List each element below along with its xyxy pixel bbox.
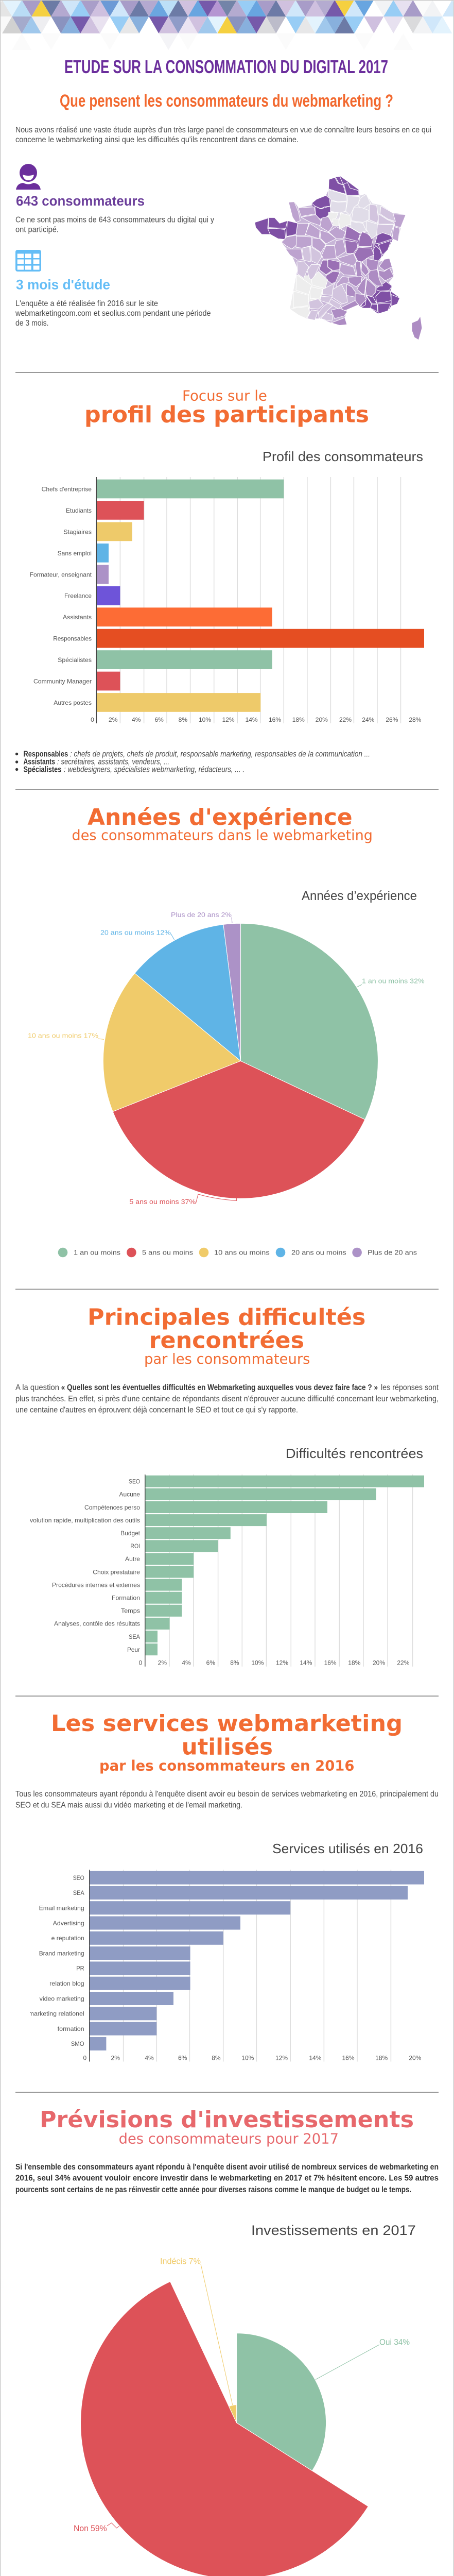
bar chart: difficultés rencontrées: Peur (127, 1646, 140, 1653)
bar chart: profil des consommateurs: Stagiaires (63, 528, 92, 535)
bar chart: difficultés rencontrées: 16% (324, 1659, 337, 1666)
stat: 3 mois d'étude: webmarketingcom.com et seolius.com pendant une période (15, 309, 211, 318)
chart title: Services utilisés en 2016 (272, 1841, 423, 1856)
bar chart: profil des consommateurs: 18% (292, 716, 305, 723)
pie chart: années d'expérience: 20 ans ou moins 12% (100, 928, 171, 937)
section heading: prévisions d'investissements: Prévisions d'investissements (40, 2107, 414, 2133)
pie chart: années d'expérience: 10 ans ou moins 17% (28, 1031, 98, 1040)
section heading: principales difficultés: Principales difficultés (88, 1304, 365, 1330)
bar chart: services utilisés: 8% (212, 2055, 221, 2062)
bar chart: difficultés rencontrées: Aucune (119, 1491, 140, 1498)
bar chart: profil des consommateurs: 2% (109, 716, 118, 723)
bar chart: services utilisés: formation (58, 2025, 84, 2032)
bar chart: profil des consommateurs: Responsables (53, 635, 92, 642)
bar chart: profil des consommateurs: 26% (386, 716, 398, 723)
section heading: services webmarketing: Les services webmarketing (51, 1710, 403, 1737)
bullet notes: Spécialistes (24, 766, 61, 774)
bar chart: difficultés rencontrées: SEO (129, 1478, 140, 1485)
pie chart: années d'expérience (28, 889, 425, 1257)
bar chart: profil des consommateurs: 16% (269, 716, 281, 723)
bar chart: profil des consommateurs: Chefs d'entreprise (42, 485, 92, 493)
stat: 643 consommateurs (15, 193, 214, 234)
bullet notes: Responsables (24, 750, 68, 758)
stat: 3 mois d'étude: 3 mois d'étude (16, 277, 110, 293)
bar chart: profil des consommateurs: 28% (409, 716, 422, 723)
bar chart: profil des consommateurs: Autres postes (54, 699, 92, 706)
icon: person (16, 164, 41, 190)
pie chart: investissements: Indécis 7% (160, 2257, 201, 2266)
bar chart: difficultés rencontrées: Budget (120, 1530, 141, 1537)
bar chart: services utilisés: marketing relationel (29, 2010, 84, 2018)
bar chart: services utilisés: Email marketing (39, 1904, 84, 1911)
pie chart: années d'expérience: 5 ans ou moins 37% (129, 1198, 196, 1206)
section heading: principales difficultés: rencontrées (149, 1327, 304, 1353)
bar chart: services utilisés: Brand marketing (39, 1950, 84, 1957)
bar chart: services utilisés: relation blog (49, 1980, 84, 1987)
legend: 1 an ou moins (74, 1249, 121, 1256)
icon: calendar (15, 250, 41, 272)
bar chart: profil des consommateurs: 22% (339, 716, 352, 723)
bar chart: profil des consommateurs: Community Manager (33, 678, 92, 685)
bar chart: difficultés rencontrées: 4% (182, 1659, 191, 1666)
legend: Plus de 20 ans (368, 1249, 417, 1256)
bar chart: difficultés rencontrées: ROI (130, 1543, 140, 1550)
stat: 643 consommateurs: ont participé. (15, 226, 59, 234)
pie chart: années d'expérience: Plus de 20 ans 2% (171, 911, 232, 919)
stat: 3 mois d'étude: de 3 mois. (15, 319, 48, 328)
bar chart: profil des consommateurs: 6% (154, 716, 164, 723)
bar chart: services utilisés: 16% (342, 2055, 355, 2062)
section heading: principales difficultés (88, 1304, 365, 1367)
section heading: profil des participants (84, 387, 369, 428)
chart title: Investissements en 2017 (251, 2223, 416, 2238)
stat: 643 consommateurs: Ce ne sont pas moins de 643 consommateurs du digital qui y (15, 215, 214, 225)
paragraph: difficultés: les réponses sont (381, 1383, 439, 1392)
paragraph: difficultés (15, 1383, 439, 1415)
legend (58, 1248, 417, 1257)
bar chart: profil des consommateurs: Etudiants (66, 507, 92, 514)
paragraph: difficultés: « Quelles sont les éventuelles difficultés en Webmarketing auxquelles vous devez faire face ? » (61, 1383, 378, 1392)
section heading: années d'expérience: des consommateurs dans le webmarketing (72, 827, 373, 844)
bullet notes: : chefs de projets, chefs de produit, responsable marketing, responsables de la communication ... (70, 750, 370, 758)
bar chart: profil des consommateurs: 12% (222, 716, 235, 723)
paragraph: services: SEO et du SEA mais aussi du vidéo marketing et de l'email marketing. (15, 1801, 242, 1810)
chart title: Années d’expérience (302, 889, 417, 903)
legend: 5 ans ou moins (142, 1249, 194, 1256)
section heading: principales difficultés: par les consommateurs (144, 1350, 310, 1367)
bar chart: profil des consommateurs: Spécialistes (58, 656, 92, 664)
bar chart: difficultés rencontrées: Formation (112, 1594, 140, 1601)
bar chart: profil des consommateurs: Sans emploi (58, 550, 92, 557)
bar chart: services utilisés: e reputation (51, 1935, 84, 1942)
bar chart: profil des consommateurs: 20% (316, 716, 328, 723)
bar chart: profil des consommateurs: Assistants (63, 614, 92, 621)
bar chart: services utilisés: PR (76, 1965, 84, 1972)
section heading: services webmarketing: par les consommateurs en 2016 (99, 1757, 354, 1774)
bar chart: difficultés rencontrées: 0 (139, 1659, 143, 1666)
bar chart: services utilisés: 20% (409, 2055, 422, 2062)
bar chart: difficultés rencontrées: 22% (397, 1659, 410, 1666)
legend: 20 ans ou moins (291, 1249, 346, 1256)
legend: 10 ans ou moins (214, 1249, 270, 1256)
bar chart: profil des consommateurs: 8% (179, 716, 187, 723)
bar chart: services utilisés: 12% (275, 2055, 288, 2062)
stat: 643 consommateurs: 643 consommateurs (16, 193, 145, 209)
intro text (15, 126, 431, 144)
bullet notes (15, 750, 370, 774)
bar chart: services utilisés: 4% (145, 2055, 154, 2062)
bar chart: difficultés rencontrées: volution rapide, multiplication des outils (30, 1517, 140, 1524)
bar chart: profil des consommateurs: Formateur, enseignant (30, 571, 92, 578)
bar chart: services utilisés: SMO (71, 2040, 84, 2047)
bullet notes: : secrétaires, assistants, vendeurs, ... (57, 757, 169, 767)
chart title: Profil des consommateurs (263, 449, 423, 464)
bar chart: difficultés rencontrées: 12% (276, 1659, 288, 1666)
section heading: profil des participants: Focus sur le (182, 387, 267, 404)
paragraph: difficultés: une centaine d'autres en éprouvent déjà concernant le SEO et tout ce qui s'y rapporte. (15, 1406, 298, 1415)
bar chart: difficultés rencontrées: 18% (348, 1659, 361, 1666)
section heading: années d'expérience: Années d'expérience (88, 804, 353, 831)
bar chart: difficultés rencontrées: 14% (300, 1659, 312, 1666)
bar chart: profil des consommateurs: 4% (132, 716, 141, 723)
bar chart: services utilisés: 0 (83, 2055, 87, 2062)
intro text: concerne le webmarketing ainsi que les difficultés qu'ils rencontrent dans ce domaine. (15, 135, 299, 144)
bar chart: services utilisés: video marketing (40, 1995, 84, 2002)
bar chart: difficultés rencontrées: SEA (129, 1633, 140, 1640)
bar chart: profil des consommateurs: 24% (362, 716, 375, 723)
bar chart: difficultés rencontrées: Compétences perso (84, 1504, 140, 1511)
bar chart: services utilisés: 2% (111, 2055, 120, 2062)
stat: 3 mois d'étude: L'enquête a été réalisée fin 2016 sur le site (15, 299, 158, 308)
bar chart: difficultés rencontrées: Analyses, contôle des résultats (54, 1620, 140, 1628)
bar chart: difficultés rencontrées: 8% (230, 1659, 239, 1666)
section heading: profil des participants: profil des participants (84, 401, 369, 428)
bar chart: services utilisés: SEA (73, 1889, 84, 1896)
bar chart: services utilisés: 6% (178, 2055, 187, 2062)
bar chart: profil des consommateurs: 0 (91, 716, 94, 723)
pie chart: investissements: Oui 34% (379, 2337, 410, 2347)
section heading: prévisions d'investissements: des consommateurs pour 2017 (119, 2130, 339, 2147)
chart title: Difficultés rencontrées (286, 1446, 423, 1461)
section heading: prévisions d'investissements (40, 2107, 414, 2147)
bar chart: difficultés rencontrées: 6% (206, 1659, 215, 1666)
section heading: années d'expérience (72, 804, 373, 844)
stat: 3 mois d'étude (15, 277, 211, 328)
pie chart: années d'expérience: 1 an ou moins 32% (362, 977, 425, 985)
bar chart: services utilisés: SEO (73, 1874, 84, 1882)
pie chart: investissements: Non 59% (74, 2523, 107, 2533)
bullet notes: : webdesigners, spécialistes webmarketing, rédacteurs, ... . (64, 766, 245, 774)
bar chart: profil des consommateurs: Freelance (64, 592, 92, 600)
bar chart: difficultés rencontrées: Procédures internes et externes (52, 1581, 140, 1588)
bar chart: difficultés rencontrées: Choix prestataire (93, 1568, 140, 1575)
bar chart: difficultés rencontrées: 10% (251, 1659, 264, 1666)
section heading: services webmarketing: utilisés (182, 1734, 273, 1760)
bar chart: services utilisés: Advertising (53, 1920, 84, 1927)
bar chart: services utilisés (29, 1841, 424, 2062)
pie chart: investissements (74, 2223, 416, 2576)
paragraph: difficultés: A la question (15, 1383, 59, 1392)
bar chart: profil des consommateurs: 10% (199, 716, 211, 723)
bar chart: difficultés rencontrées: Autre (125, 1555, 140, 1563)
bar chart: services utilisés: 14% (309, 2055, 322, 2062)
paragraph: prévisions: 2016, seul 34% avouent vouloir encore investir dans le webmarketing en 2017 et 7% hésitent encore. Les 59 autres (15, 2174, 439, 2183)
section heading: services webmarketing (51, 1710, 403, 1774)
bar chart: profil des consommateurs (30, 449, 424, 723)
paragraph: services (15, 1790, 439, 1810)
paragraph: prévisions (15, 2163, 439, 2194)
map of France (255, 176, 422, 340)
bar chart: difficultés rencontrées: Temps (121, 1607, 140, 1615)
bar chart: profil des consommateurs: 14% (246, 716, 258, 723)
bullet notes: Assistants (24, 757, 55, 767)
bar chart: services utilisés: 10% (241, 2055, 254, 2062)
header triangle pattern (0, 0, 453, 50)
bar chart: difficultés rencontrées (30, 1446, 424, 1667)
bar chart: difficultés rencontrées: 2% (158, 1659, 167, 1666)
bar chart: services utilisés: 18% (375, 2055, 388, 2062)
bar chart: difficultés rencontrées: 20% (373, 1659, 385, 1666)
